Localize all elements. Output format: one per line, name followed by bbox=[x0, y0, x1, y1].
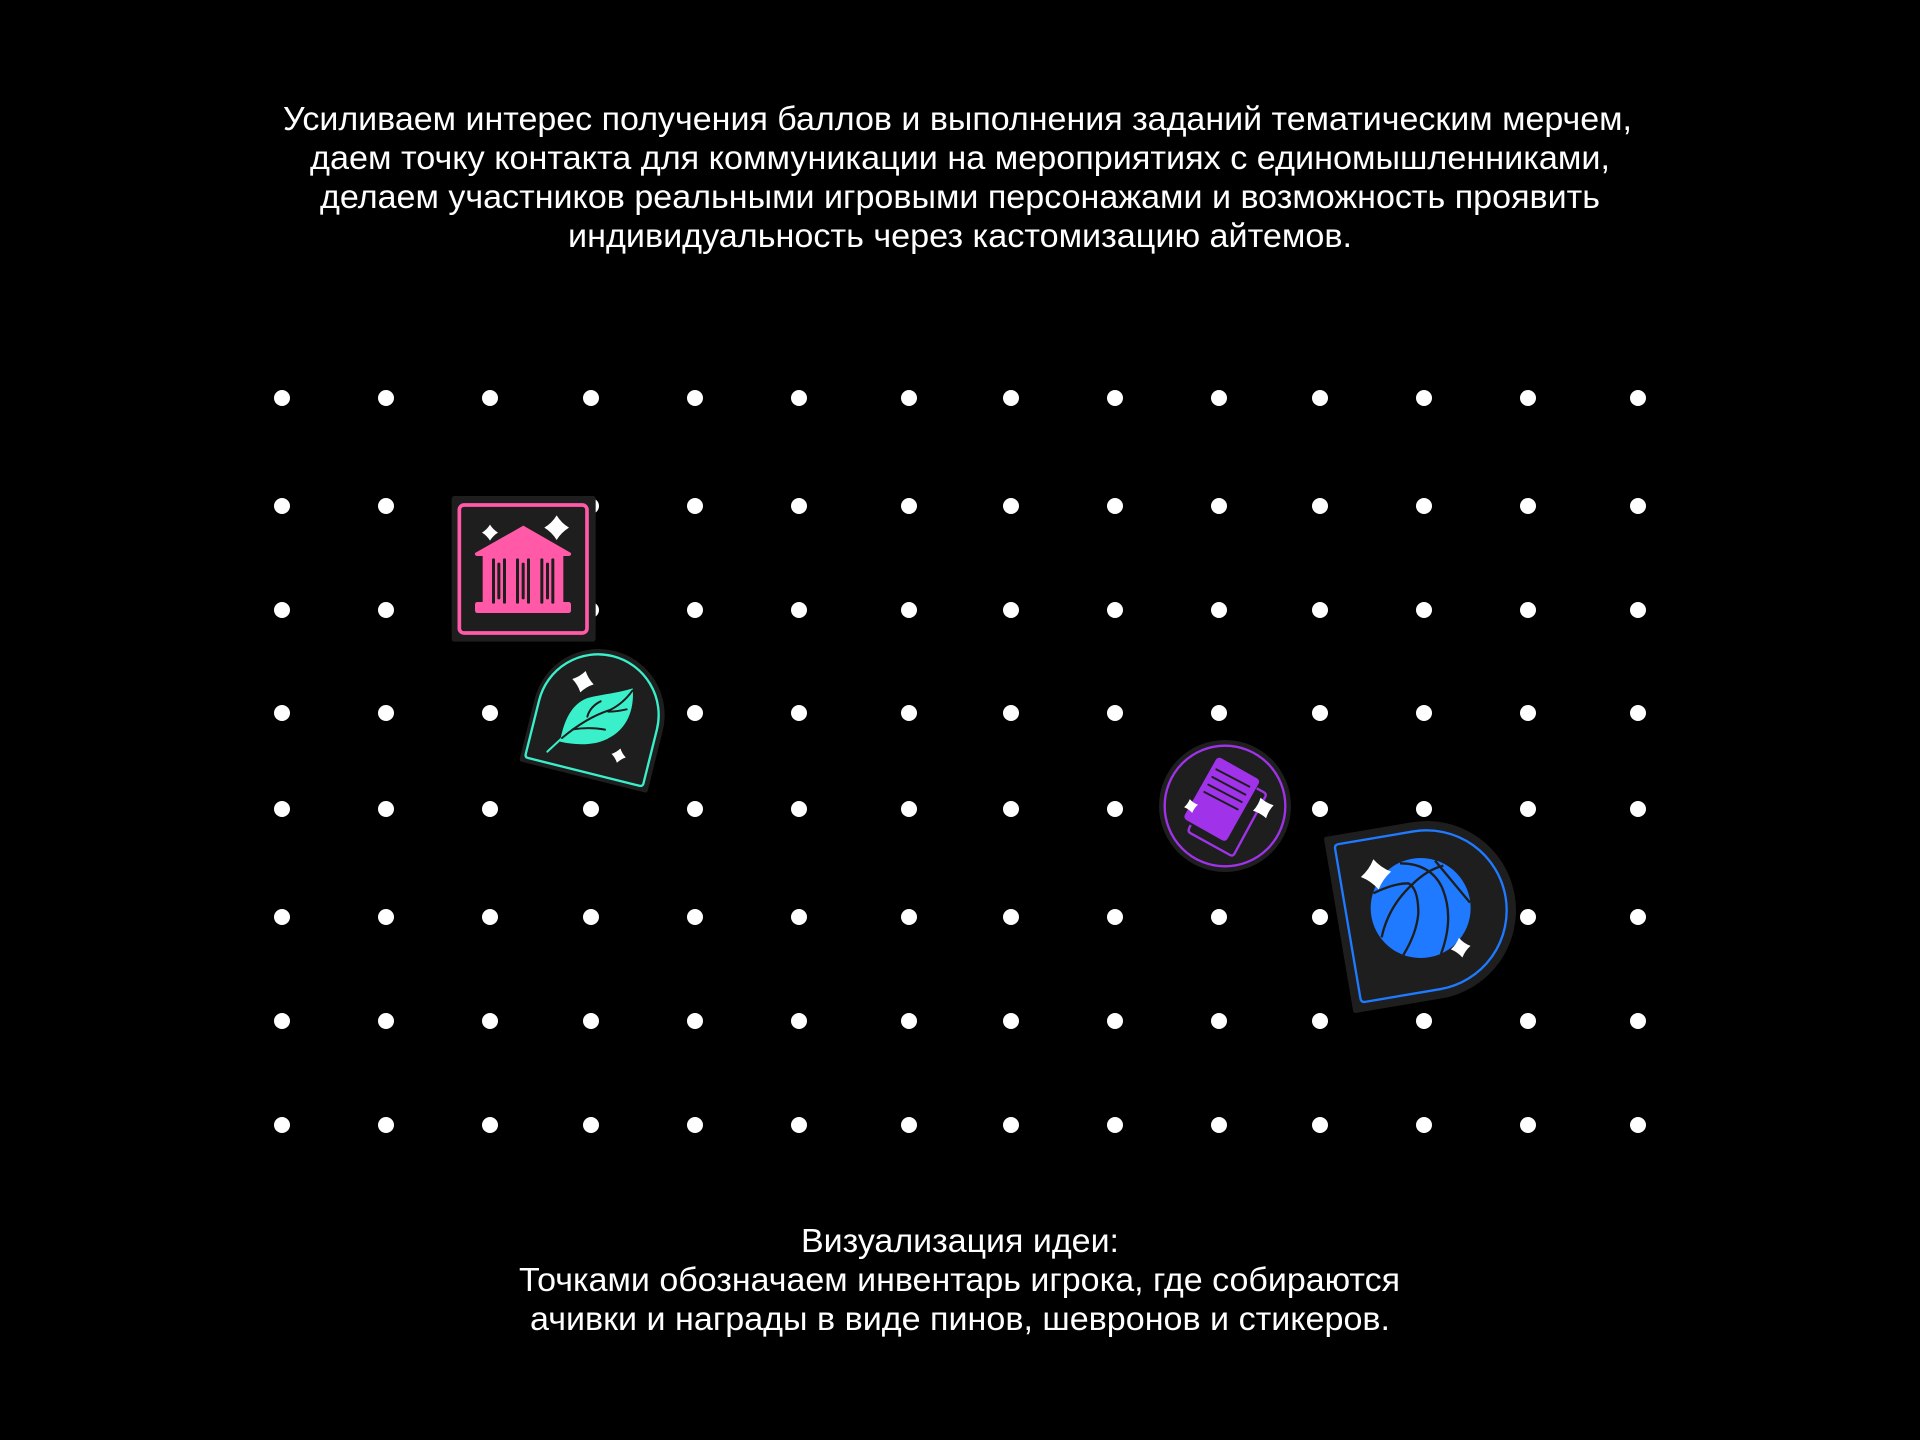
caption text block: Точками обозначаем инвентарь игрока, где собираются bbox=[519, 1261, 1400, 1298]
badge: pink museum bbox=[452, 496, 596, 642]
caption text block: Визуализация идеи: bbox=[801, 1222, 1119, 1259]
badge: purple document bbox=[1159, 740, 1291, 872]
intro text block: индивидуальность через кастомизацию айтемов. bbox=[568, 217, 1352, 254]
intro text block: делаем участников реальными игровыми персонажами и возможность проявить bbox=[320, 178, 1600, 215]
intro text block: даем точку контакта для коммуникации на мероприятиях с единомышленниками, bbox=[310, 139, 1610, 176]
caption text block bbox=[519, 1222, 1400, 1337]
intro text block: Усиливаем интерес получения баллов и выполнения заданий тематическим мерчем, bbox=[283, 100, 1632, 137]
intro text block bbox=[283, 100, 1632, 254]
dot grid: player inventory bbox=[274, 390, 1646, 1133]
badge: teal leaf bbox=[519, 635, 679, 793]
caption text block: ачивки и награды в виде пинов, шевронов и стикеров. bbox=[530, 1300, 1390, 1337]
badge: blue basketball bbox=[1324, 807, 1530, 1013]
